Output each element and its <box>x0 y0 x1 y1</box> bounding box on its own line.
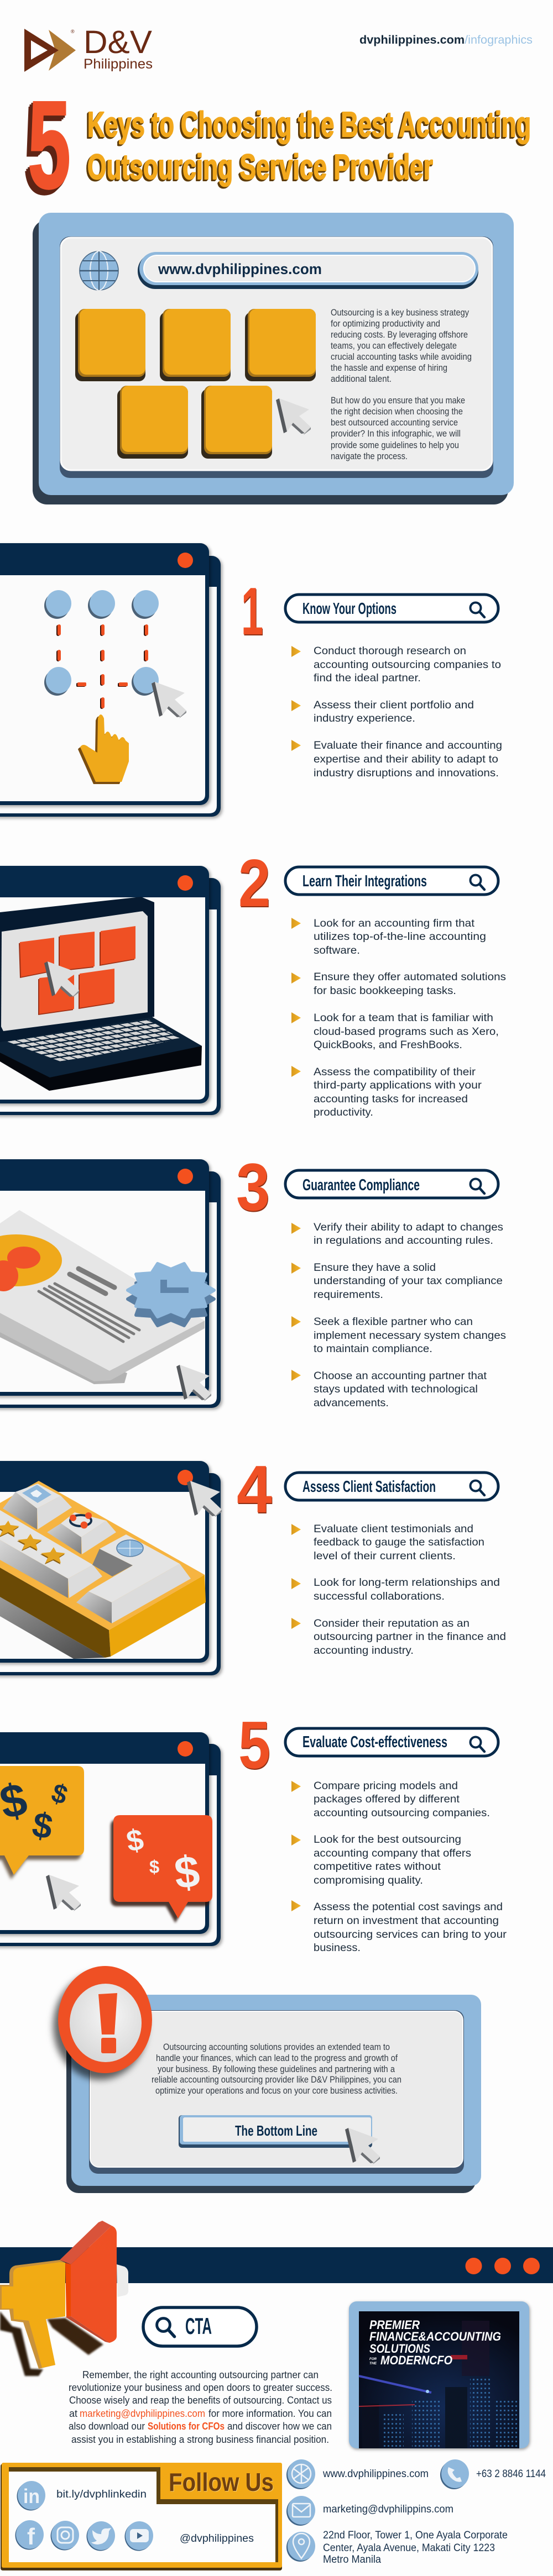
address bar: www.dvphilippines.com <box>158 261 322 277</box>
icon: red speech bubble: $ <box>149 1857 159 1877</box>
icon: cursor <box>176 1365 211 1401</box>
bullets 5: business. <box>314 1942 361 1954</box>
grey text bars <box>39 1269 139 1342</box>
bullets 1: industry experience. <box>314 712 415 724</box>
icon: globe <box>117 1540 143 1557</box>
contact block <box>286 2459 546 2566</box>
cta text: and discover how we can <box>227 2420 332 2432</box>
search pill: Learn Their Integrations: Learn Their Integrations <box>302 872 427 890</box>
icon: facebook <box>15 2520 44 2549</box>
bullets 2: productivity. <box>314 1106 373 1118</box>
card headline: MODERNCFO <box>380 2353 452 2367</box>
yellow tiles <box>75 309 316 459</box>
icon: location pin <box>286 2532 315 2562</box>
search pill: Assess Client Satisfaction: Assess Client Satisfaction <box>302 1478 436 1496</box>
bullets 3: Choose an accounting partner that <box>314 1370 487 1382</box>
bullets 1: Conduct thorough research on <box>314 645 466 657</box>
card headline: FINANCE&ACCOUNTING <box>369 2330 501 2343</box>
intro text: teams, you can effectively delegate <box>331 341 457 351</box>
bottom line text <box>152 2042 401 2096</box>
search pill: Evaluate Cost-effectiveness <box>285 1728 498 1756</box>
card headline: THE <box>369 2362 377 2365</box>
icon: linkedin <box>17 2481 45 2511</box>
keys <box>0 1484 191 1623</box>
illustration: laptop <box>0 897 202 1091</box>
city skyline <box>359 2321 517 2448</box>
search pill: Learn Their Integrations <box>285 867 498 895</box>
bullets 5: return on investment that accounting <box>314 1915 499 1927</box>
icon: yellow speech bubble: $ <box>29 1804 56 1847</box>
icon: globe <box>80 251 118 290</box>
bottom line text: reliable accounting outsourcing provider like D&V Philippines, you can <box>152 2075 401 2085</box>
linkedin url: bit.ly/dvphlinkedin <box>56 2489 147 2500</box>
bullets 4: successful collaborations. <box>314 1590 445 1602</box>
bullets 2: Look for a team that is familiar with <box>314 1012 493 1024</box>
cta banner <box>0 2247 553 2283</box>
icon: linkedin: in <box>23 2485 40 2507</box>
icon: alert sign <box>58 1966 152 2073</box>
bullets 5: packages offered by different <box>314 1793 460 1805</box>
cta text: revolutionize your business and open doors to greater success. <box>69 2382 332 2393</box>
bullets 2: Look for an accounting firm that <box>314 917 475 929</box>
contact block: Metro Manila <box>323 2554 381 2566</box>
logo <box>24 24 153 72</box>
bullets 5: competitive rates without <box>314 1860 441 1873</box>
icon: cursor <box>187 1481 222 1517</box>
bullets 3: Ensure they have a solid <box>314 1261 436 1274</box>
bottom line text: handle your finances, which can lead to the progress and growth of <box>156 2053 398 2063</box>
intro text: for optimizing productivity and <box>331 319 440 329</box>
card headline: FOR <box>369 2358 377 2361</box>
diagram: dashed connectors <box>58 624 148 708</box>
cta text <box>69 2369 332 2445</box>
icon: cursor <box>152 682 186 718</box>
icon: comment <box>22 1485 51 1503</box>
search pill: CTA <box>143 2307 257 2346</box>
bullets 5: Look for the best outsourcing <box>314 1833 461 1846</box>
bullets 1: Evaluate their finance and accounting <box>314 739 502 751</box>
section 1 window <box>0 543 221 817</box>
bullets 4: outsourcing partner in the finance and <box>314 1631 506 1643</box>
bullets 3: in regulations and accounting rules. <box>314 1234 493 1247</box>
search pill: CTA: CTA <box>185 2313 212 2339</box>
bullets 1 <box>291 645 502 779</box>
icon: facebook: f <box>27 2524 35 2549</box>
search pill: Know Your Options <box>285 595 498 622</box>
bullets 2: for basic bookkeeping tasks. <box>314 985 456 997</box>
icon: megaphone <box>0 2221 128 2376</box>
red app tiles <box>20 926 135 1014</box>
bottom line text: your business. By following these guidelines and partnering with a <box>158 2064 395 2074</box>
card headline <box>369 2318 501 2367</box>
bullets 5: Compare pricing models and <box>314 1780 458 1792</box>
bullets 4: Consider their reputation as an <box>314 1617 469 1629</box>
bullets 1: Assess their client portfolio and <box>314 699 474 711</box>
contact block: +63 2 8846 1144 <box>476 2468 546 2480</box>
bullets 2: utilizes top-of-the-line accounting <box>314 930 486 943</box>
panel: the bottom line <box>66 1995 481 2193</box>
intro text: the hassle and expense of hiring <box>331 363 447 373</box>
intro text: the right decision when choosing the <box>331 407 463 417</box>
cta text: assist you in establishing a strong business financial position. <box>71 2433 329 2445</box>
bullets 2: cloud-based programs such as Xero, <box>314 1026 499 1038</box>
bullets 5 <box>291 1780 507 1954</box>
intro text: reducing costs. By leveraging offshore <box>331 330 468 340</box>
intro text: crucial accounting tasks while avoiding <box>331 352 472 362</box>
contact block: www.dvphilippines.com <box>322 2468 429 2480</box>
logo: ® <box>71 29 75 34</box>
intro text: navigate the process. <box>331 451 408 461</box>
diagram: option nodes <box>46 590 159 693</box>
panel: intro browser window <box>33 213 514 504</box>
bullets 4: Evaluate client testimonials and <box>314 1523 473 1535</box>
panel: follow us <box>1 2463 282 2570</box>
stars <box>0 1521 65 1563</box>
icon: yellow speech bubble: $ <box>48 1778 71 1811</box>
search pill: Evaluate Cost-effectiveness: Evaluate Cost-effectiveness <box>302 1733 447 1751</box>
icon: web <box>286 2459 315 2489</box>
bullets 4 <box>291 1523 506 1657</box>
bullets 3: understanding of your tax compliance <box>314 1275 503 1287</box>
bullets 4: accounting industry. <box>314 1644 414 1657</box>
cta text: marketing@dvphilippines.com <box>80 2407 205 2419</box>
section 3 window <box>0 1159 221 1408</box>
handle: @dvphilippines <box>180 2533 254 2545</box>
icon: team <box>70 1512 92 1528</box>
follow us heading: Follow Us <box>169 2468 274 2496</box>
bullets 3 <box>291 1221 506 1409</box>
bullets 5: Assess the potential cost savings and <box>314 1901 503 1913</box>
bottom line text: optimize your operations and focus on your core business activities. <box>155 2086 398 2096</box>
bullets 5: compromising quality. <box>314 1874 423 1886</box>
bullets 2: QuickBooks, and FreshBooks. <box>314 1039 462 1051</box>
logo: Philippines <box>84 56 153 72</box>
icon: cursor <box>44 961 79 998</box>
icon: pointing hand <box>78 714 129 784</box>
bullets 3: to maintain compliance. <box>314 1343 432 1355</box>
search pill: Know Your Options: Know Your Options <box>302 600 397 618</box>
address bar <box>138 252 478 289</box>
chart disc <box>0 1234 62 1291</box>
icon: badge gear <box>128 1264 214 1326</box>
bullets 5: outsourcing services can bring to your <box>314 1928 507 1941</box>
intro text: But how do you ensure that you make <box>331 396 465 406</box>
section 5 window <box>0 1732 221 1946</box>
bullets 3: Verify their ability to adapt to changes <box>314 1221 503 1233</box>
icon: cursor <box>345 2128 380 2164</box>
section 2 window <box>0 866 221 1115</box>
cta text: Choose wisely and reap the benefits of outsourcing. Contact us <box>69 2394 332 2406</box>
card headline: SOLUTIONS <box>369 2342 430 2356</box>
contact block: 22nd Floor, Tower 1, One Ayala Corporate <box>323 2530 508 2541</box>
icon: red speech bubble <box>113 1815 212 1918</box>
number 2: 2 <box>238 845 270 921</box>
bullets 1: expertise and their ability to adapt to <box>314 753 498 765</box>
cta text: Solutions for CFOs <box>148 2420 225 2432</box>
number 1: 1 <box>241 574 263 649</box>
number 5: 5 <box>238 1707 270 1783</box>
intro text <box>331 308 472 461</box>
header url: dvphilippines.com /infographics <box>359 34 533 46</box>
bullets 4: level of their current clients. <box>314 1550 456 1562</box>
cta text: for more information. You can <box>208 2407 332 2419</box>
search pill: Guarantee Compliance <box>285 1170 498 1198</box>
icon: cursor <box>276 398 311 435</box>
illustration: rating keyboard tray <box>0 1481 206 1659</box>
bullets 5: accounting outsourcing companies. <box>314 1807 490 1819</box>
bullets 2: third-party applications with your <box>314 1079 482 1091</box>
intro text: provider? In this infographic, we will <box>331 429 461 439</box>
cta text: at <box>69 2407 77 2419</box>
bottom line text: Outsourcing accounting solutions provides an extended team to <box>163 2042 390 2052</box>
bullets 2 <box>291 917 506 1118</box>
icon: phone <box>440 2459 469 2489</box>
number 4: 4 <box>237 1452 272 1527</box>
button: The Bottom Line <box>179 2115 372 2148</box>
bullets 2: software. <box>314 944 360 956</box>
bullets 2: Ensure they offer automated solutions <box>314 971 506 983</box>
search pill: Guarantee Compliance: Guarantee Compliance <box>302 1176 420 1194</box>
bullets 4: feedback to gauge the satisfaction <box>314 1536 484 1548</box>
intro text: provide some guidelines to help you <box>331 440 459 450</box>
bullets 2: accounting tasks for increased <box>314 1093 468 1105</box>
bullets 3: advancements. <box>314 1397 389 1409</box>
icon: cursor <box>46 1875 81 1911</box>
search pill: Assess Client Satisfaction <box>285 1473 498 1500</box>
cta text: also download our <box>69 2420 145 2432</box>
intro text: Outsourcing is a key business strategy <box>331 308 469 318</box>
logo: D&V <box>84 24 152 60</box>
contact block: Center, Ayala Avenue, Makati City 1223 <box>323 2542 495 2554</box>
intro text: best outsourced accounting service <box>331 418 458 428</box>
title numeral 5: 5 <box>28 75 71 214</box>
icon: mail <box>286 2496 315 2526</box>
title <box>87 104 531 187</box>
contact block: marketing@dvphilippins.com <box>323 2504 453 2515</box>
illustration: compliance card <box>0 1210 214 1401</box>
icon: yellow speech bubble <box>0 1766 84 1875</box>
cta text: Remember, the right accounting outsourcing partner can <box>82 2369 319 2380</box>
icon: red speech bubble: $ <box>172 1847 202 1899</box>
bullets 4: Look for long-term relationships and <box>314 1576 500 1589</box>
button: The Bottom Line: The Bottom Line <box>235 2122 317 2139</box>
bullets 3: Seek a flexible partner who can <box>314 1316 473 1328</box>
bullets 3: requirements. <box>314 1289 383 1301</box>
section 4 window <box>0 1461 222 1675</box>
card headline: PREMIER <box>369 2318 420 2332</box>
bullets 1: accounting outsourcing companies to <box>314 659 501 671</box>
icon: red speech bubble: $ <box>124 1823 146 1858</box>
bullets 3: implement necessary system changes <box>314 1329 506 1342</box>
bullets 5: accounting company that offers <box>314 1847 471 1859</box>
intro text: additional talent. <box>331 374 392 384</box>
cfo solutions image card <box>349 2301 529 2448</box>
number 3: 3 <box>236 1149 270 1224</box>
bullets 3: stays updated with technological <box>314 1383 478 1395</box>
bullets 1: find the ideal partner. <box>314 672 421 684</box>
icon: youtube <box>125 2521 153 2551</box>
icon: instagram <box>51 2521 79 2551</box>
bullets 2: Assess the compatibility of their <box>314 1066 476 1078</box>
icon: twitter <box>86 2521 115 2551</box>
bullets 1: industry disruptions and innovations. <box>314 767 499 779</box>
